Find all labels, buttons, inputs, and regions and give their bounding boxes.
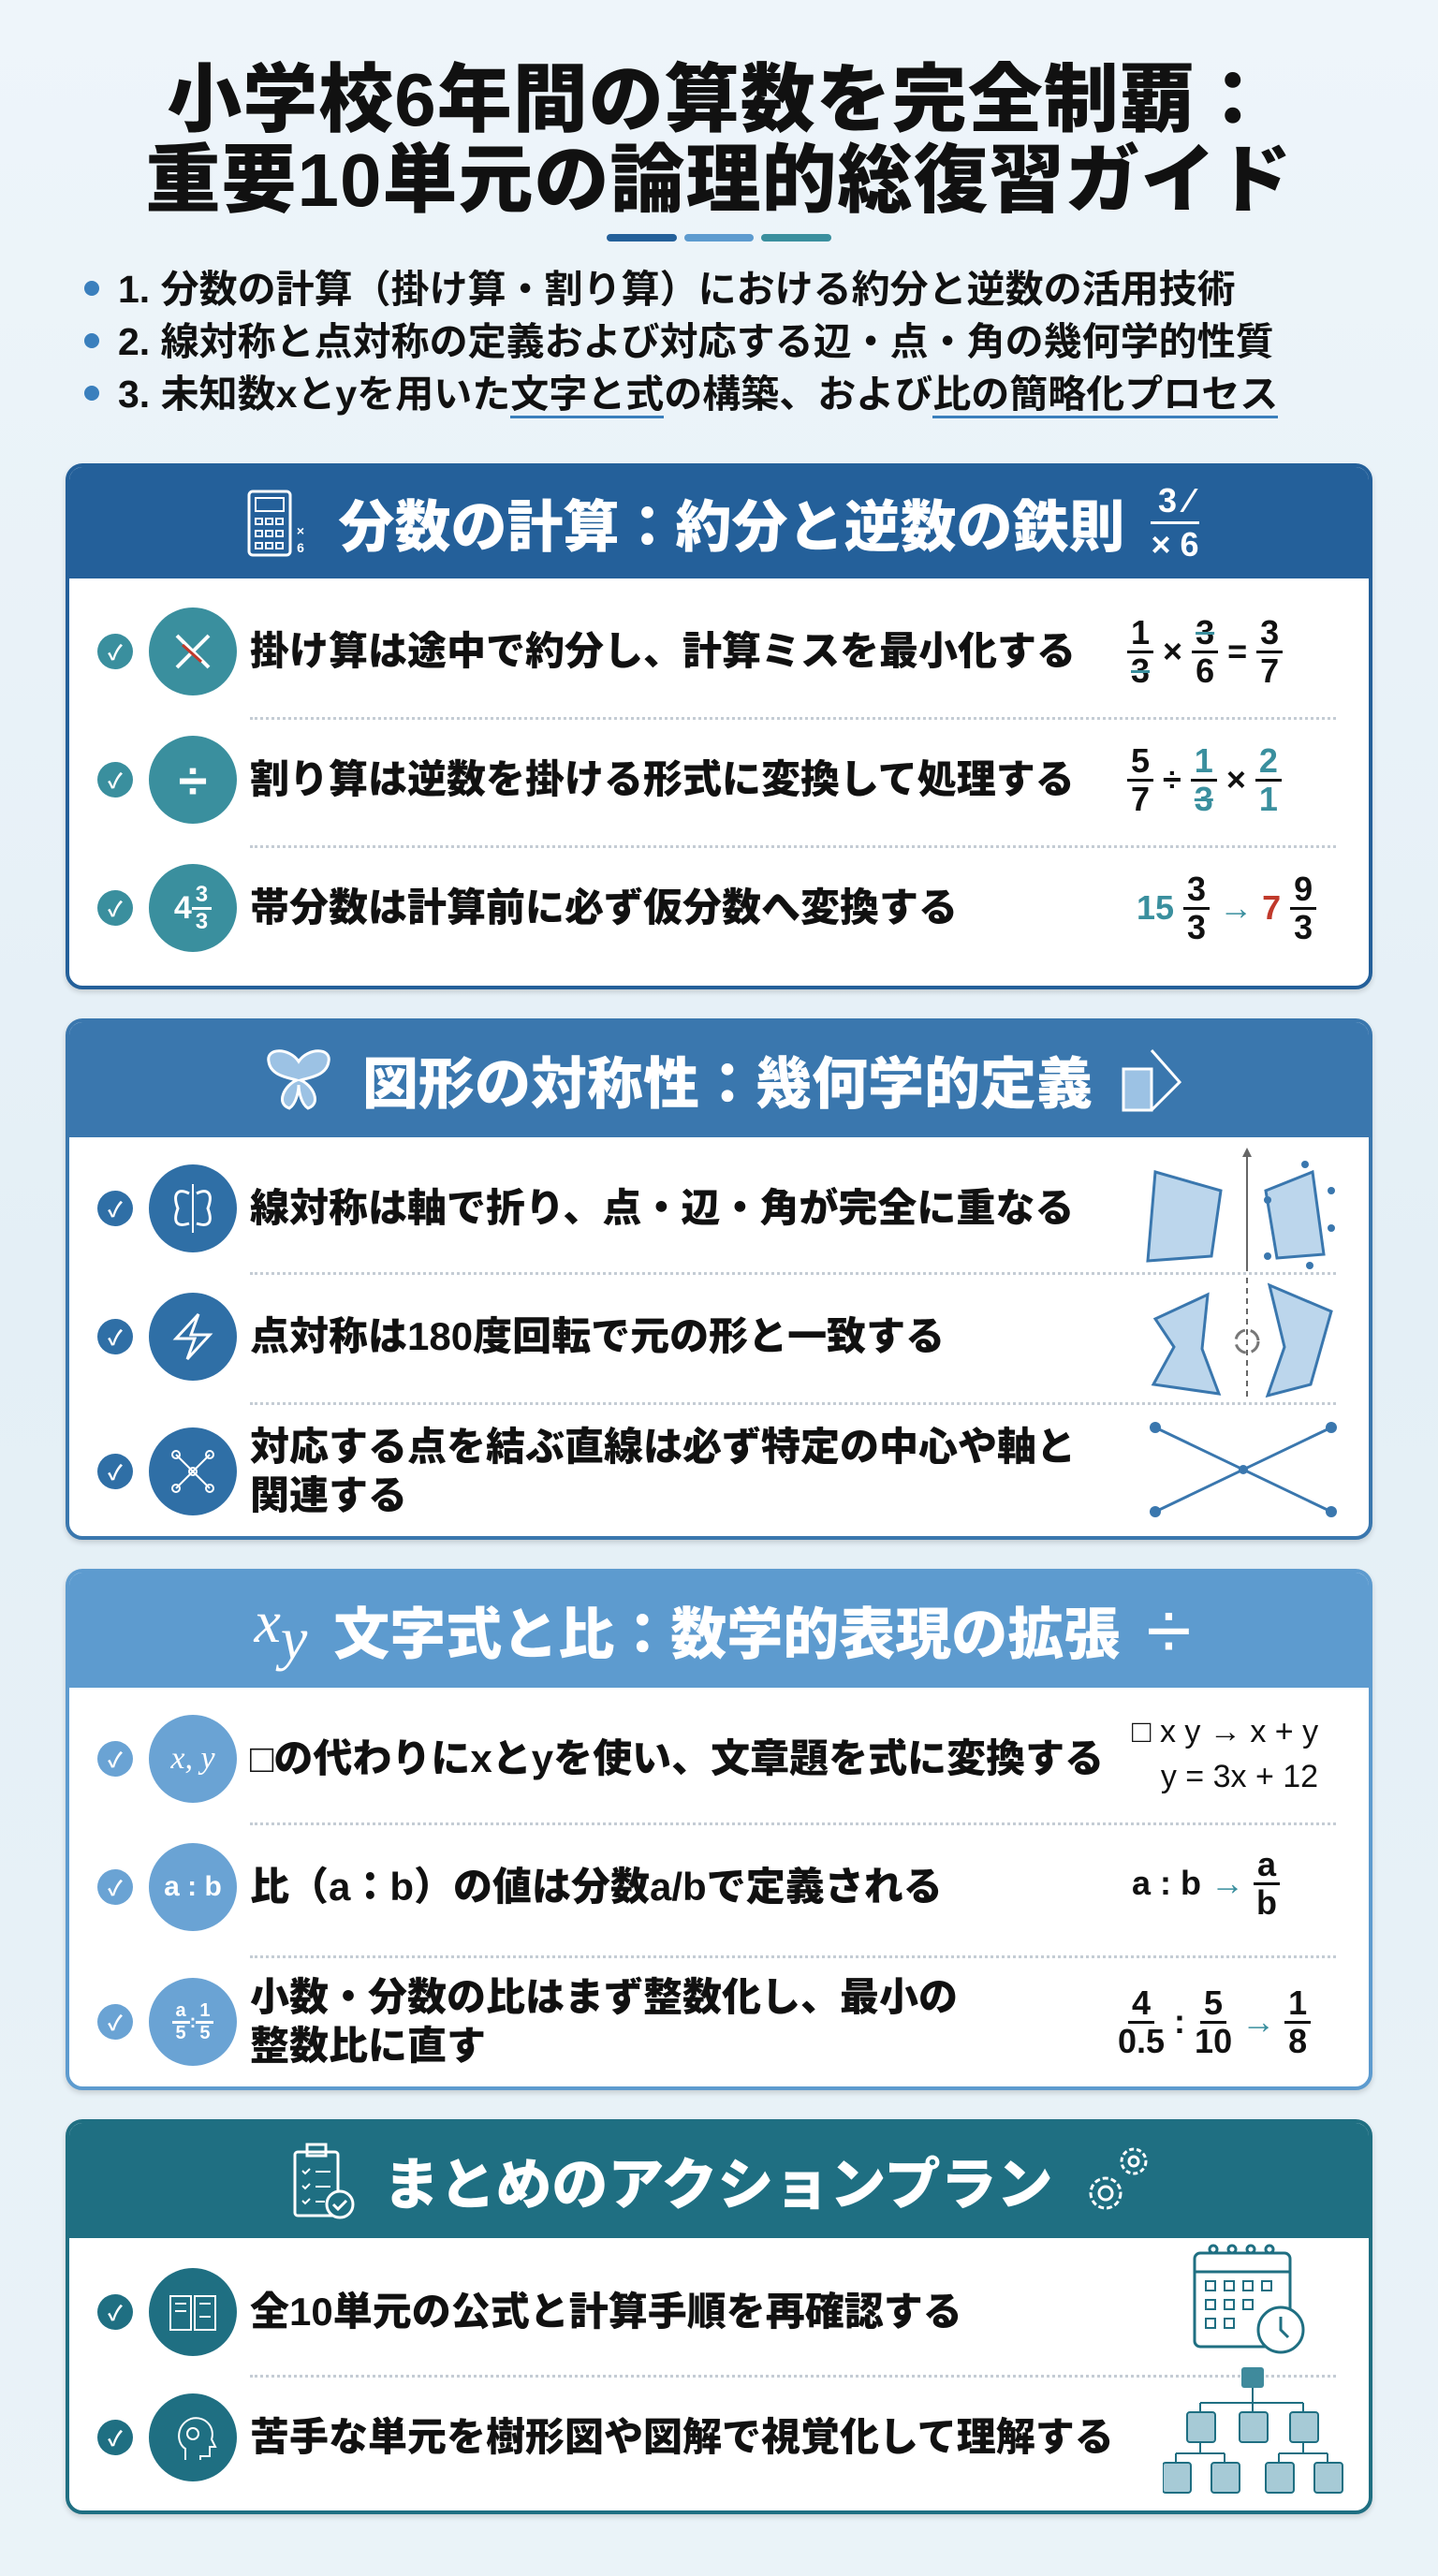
row 1: ✓: [108, 2302, 123, 2325]
formula 3: 3: [1294, 908, 1313, 946]
icon: divide: ÷: [179, 751, 207, 809]
bullet 1: 1. 分数の計算（掛け算・割り算）における約分と逆数の活用技術: [118, 268, 1236, 311]
icon: x,y: x, y: [170, 1741, 215, 1776]
formula 3: [1137, 870, 1316, 946]
formula: ratio: a: [1257, 1845, 1276, 1883]
formula: simplify: 4: [1132, 1983, 1151, 2022]
formula: ratio: b: [1256, 1883, 1277, 1922]
row 2: ✓: [108, 1326, 123, 1350]
panel: algebra and ratio: [66, 1569, 1372, 2090]
formula: xy: □ x y → x + y: [1132, 1714, 1318, 1749]
row 1: ✓: [108, 1198, 123, 1222]
icon: clipboard: [294, 2144, 354, 2218]
formula 1: 3: [1260, 613, 1279, 651]
panel header: action plan: [69, 2123, 1376, 2238]
row 2: 割り算は逆数を掛ける形式に変換して処理する: [250, 757, 1075, 801]
formula: simplify: :: [1174, 2002, 1185, 2041]
formula 2: 1: [1259, 780, 1278, 818]
formula 1: [1127, 613, 1283, 690]
row 3: 関連する: [250, 1473, 407, 1517]
separator: [250, 1272, 1336, 1275]
row 1: □の代わりにxとyを使い、文章題を式に変換する: [250, 1736, 1104, 1780]
formula 1: 7: [1260, 651, 1279, 690]
row 3: 小数・分数の比はまず整数化し、最小の: [250, 1975, 958, 2019]
formula 1: 1: [1131, 613, 1150, 651]
icon: book: [149, 2268, 237, 2356]
icon: mixed number: [149, 864, 237, 952]
icon: point symmetry: [149, 1293, 237, 1381]
icon: calculator: ×: [297, 522, 305, 537]
separator: [250, 2375, 1336, 2378]
icon: fraction ratio: :: [190, 2011, 196, 2031]
icon: fraction ratio: [149, 1978, 237, 2066]
formula 2: [1127, 741, 1282, 818]
panel header: symmetry: [69, 1022, 1376, 1137]
formula 3: 15: [1137, 888, 1174, 927]
panel: fractions: [66, 463, 1372, 989]
formula: ratio: →: [1211, 1864, 1244, 1902]
formula 3: 3: [1187, 908, 1206, 946]
row 2: 比（a：b）の値は分数a/bで定義される: [250, 1865, 943, 1909]
bullet 2: 2. 線対称と点対称の定義および対応する辺・点・角の幾何学的性質: [118, 320, 1274, 363]
formula 3: 7: [1262, 888, 1281, 927]
formula 3: →: [1219, 888, 1253, 927]
icon: fraction: × 6: [1151, 525, 1199, 564]
formula: xy: [1132, 1714, 1318, 1794]
icon: line symmetry: [149, 1164, 237, 1252]
formula 2: ÷ ×: [1163, 760, 1246, 798]
formula: simplify: 10: [1195, 2022, 1232, 2060]
bullet 3: 3. 未知数xとyを用いた文字と式の構築、および比の簡略化プロセス: [118, 373, 1278, 416]
icon: head: [149, 2393, 237, 2481]
row 1: [97, 1148, 1335, 1271]
formula: simplify: 8: [1288, 2022, 1307, 2060]
row 1: [97, 2245, 1305, 2356]
formula 2: 7: [1131, 780, 1150, 818]
icon: fraction ratio: 5: [176, 2022, 186, 2042]
title accent bars: [607, 234, 831, 242]
formula 1: 6: [1196, 651, 1214, 690]
figure: line symmetry: [1146, 1148, 1335, 1271]
row 3: ✓: [108, 898, 123, 921]
row 3: ✓: [108, 2012, 123, 2035]
separator: [250, 845, 1336, 848]
formula: simplify: 1: [1288, 1983, 1307, 2022]
icon: calendar clock: [1193, 2245, 1305, 2353]
separator: [250, 1955, 1336, 1958]
row 2: 苦手な単元を樹形図や図解で視覚化して理解する: [250, 2415, 1114, 2459]
icon: fraction ratio: 5: [199, 2022, 210, 2042]
panel header: algebra: [69, 1573, 1376, 1688]
icon: calculator: 6: [298, 539, 305, 554]
icon: mixed number: 4: [174, 889, 192, 925]
row 3: [97, 1422, 1337, 1517]
row 2: ✓: [108, 1877, 123, 1900]
row 1: [97, 607, 1283, 695]
panel header: algebra: 文字式と比：数学的表現の拡張: [333, 1603, 1120, 1666]
icon: calculator: [247, 490, 305, 556]
row 3: 整数比に直す: [250, 2024, 486, 2068]
icon: xy: xy: [254, 1588, 307, 1672]
icon: a:b: a : b: [164, 1871, 222, 1902]
formula 1: 3: [1131, 651, 1150, 690]
title: 重要10単元の論理的総復習ガイド: [146, 139, 1292, 222]
separator: [250, 717, 1336, 720]
formula 2: 2: [1259, 741, 1278, 780]
row 3: [97, 864, 1316, 952]
icon: cancel: [149, 607, 237, 695]
row 2: ✓: [108, 769, 123, 793]
formula 3: 9: [1294, 870, 1313, 908]
formula: simplify: →: [1241, 2002, 1275, 2041]
separator: [250, 1822, 1336, 1825]
row 1: 線対称は軸で折り、点・辺・角が完全に重なる: [250, 1186, 1074, 1230]
icon: fraction: 3 ⁄: [1158, 481, 1192, 520]
icon: divide: [149, 736, 237, 824]
icon: mixed number: 3: [196, 882, 208, 907]
row 2: [97, 1278, 1333, 1398]
separator: [250, 1402, 1336, 1405]
row 1: 掛け算は途中で約分し、計算ミスを最小化する: [250, 629, 1076, 673]
formula: simplify: [1118, 1983, 1311, 2060]
panel: symmetry: [66, 1018, 1372, 1540]
formula 2: 1: [1195, 741, 1213, 780]
formula: xy: y = 3x + 12: [1161, 1759, 1318, 1794]
figure: point symmetry: [1152, 1278, 1333, 1398]
icon: fraction: [1151, 481, 1199, 564]
row 1: 全10単元の公式と計算手順を再確認する: [250, 2290, 962, 2334]
formula: ratio: a : b: [1132, 1864, 1201, 1902]
icon: butterfly: [267, 1049, 330, 1110]
formula: simplify: 0.5: [1118, 2022, 1165, 2060]
row 3: 対応する点を結ぶ直線は必ず特定の中心や軸と: [250, 1425, 1076, 1469]
icon: fraction ratio: 1: [199, 1999, 210, 2020]
panel header: action plan: まとめのアクションプラン: [383, 2154, 1053, 2217]
formula 2: 3: [1195, 780, 1213, 818]
icon: fold: [1122, 1049, 1181, 1112]
icon: divide: ÷: [1146, 1584, 1192, 1676]
figure: crossing lines: [1150, 1422, 1337, 1517]
panel header: fractions: [69, 467, 1376, 578]
icon: mixed number: 3: [196, 908, 208, 934]
icon: a:b: [149, 1843, 237, 1931]
formula: ratio: [1132, 1845, 1280, 1922]
icon: x,y: [149, 1715, 237, 1803]
panel header: symmetry: 図形の対称性：幾何学的定義: [362, 1053, 1093, 1116]
row 2: [97, 736, 1282, 824]
row 2: [97, 2367, 1343, 2494]
row 1: ✓: [108, 1749, 123, 1772]
row 1: [97, 1714, 1318, 1803]
formula 1: 3: [1196, 613, 1214, 651]
formula: simplify: 5: [1204, 1983, 1223, 2022]
title: [146, 58, 1292, 222]
icon: connected points: [149, 1427, 237, 1515]
row 3: 帯分数は計算前に必ず仮分数へ変換する: [250, 886, 958, 929]
formula 1: × =: [1163, 632, 1247, 670]
title: 小学校6年間の算数を完全制覇：: [167, 58, 1271, 141]
row 2: ✓: [108, 2427, 123, 2451]
panel: action plan: [66, 2119, 1372, 2514]
icon: gears: [1090, 2147, 1148, 2209]
formula 3: 3: [1187, 870, 1206, 908]
panel header: fractions: 分数の計算：約分と逆数の鉄則: [338, 496, 1124, 559]
row 1: ✓: [108, 641, 123, 665]
row 2: [97, 1843, 1280, 1931]
icon: tree diagram: [1163, 2367, 1343, 2494]
row 3: [97, 1975, 1311, 2068]
icon: fraction ratio: a: [176, 1999, 186, 2020]
row 3: ✓: [108, 1461, 123, 1485]
formula 2: 5: [1131, 741, 1150, 780]
row 2: 点対称は180度回転で元の形と一致する: [250, 1314, 945, 1358]
